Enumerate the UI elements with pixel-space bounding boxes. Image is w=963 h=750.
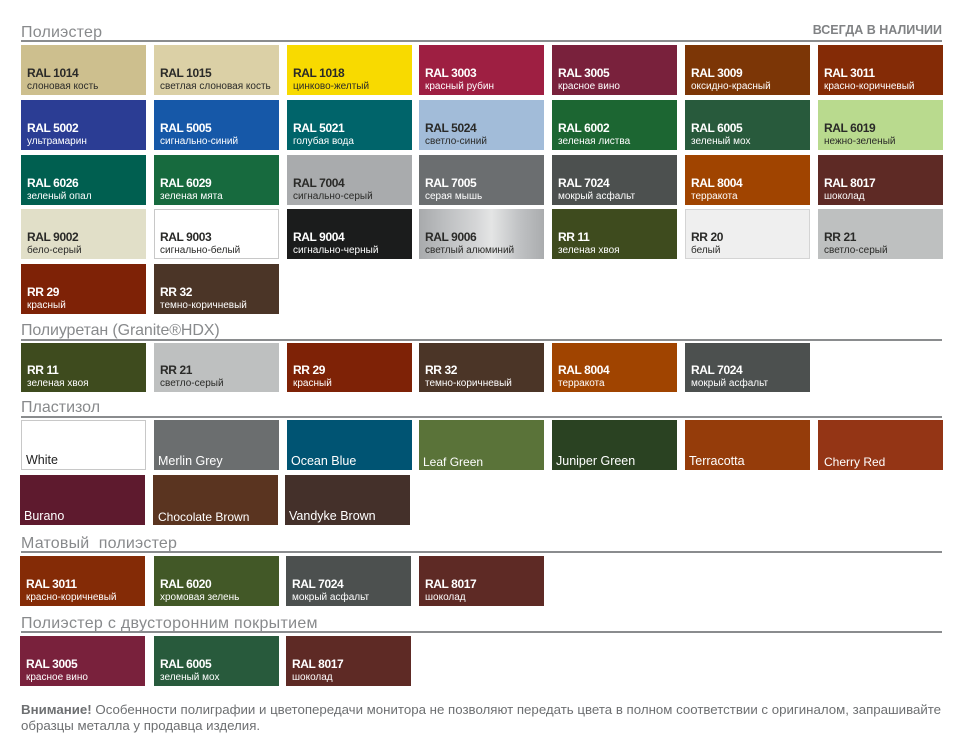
panel: полиэстер swatches: RAL 9004 — [293, 230, 344, 244]
text: внимание: Внимание! Особенности полиграфии и цветопередачи монитора не позволяют передать цвета в полном соответствии с оригиналом, запрашивайте — [21, 702, 941, 717]
panel: полиэстер swatches: RAL 9006 — [425, 230, 476, 244]
panel: полиэстер swatches: бело-серый — [27, 245, 82, 256]
panel: полиэстер swatches: оксидно-красный — [691, 81, 771, 92]
heading: двусторонним покрытием: Полиэстер с двусторонним покрытием — [21, 615, 318, 632]
panel: полиэстер swatches: RAL 3009 — [691, 66, 742, 80]
panel: двусторонние swatches: шоколад — [292, 672, 333, 683]
panel: полиэстер swatches: зеленая листва — [558, 136, 630, 147]
heading: Полиуретан: Полиуретан (Granite®HDX) — [21, 322, 220, 339]
panel: полиуретан swatches: мокрый асфальт — [691, 378, 768, 389]
panel: матовый swatches: RAL 6020 — [160, 577, 211, 591]
panel: матовый swatches: хромовая зелень — [160, 592, 239, 603]
panel: полиуретан swatches: светло-серый — [160, 378, 224, 389]
panel: полиэстер swatches: RR 11 — [558, 230, 589, 244]
panel: матовый swatches: мокрый асфальт — [292, 592, 369, 603]
panel: двусторонние swatches: красное вино — [26, 672, 88, 683]
panel: полиэстер swatches: сигнально-серый — [293, 191, 373, 202]
panel: полиуретан swatches: темно-коричневый — [425, 378, 512, 389]
panel: полиэстер swatches: RAL 7024 — [558, 176, 609, 190]
panel: матовый swatches — [20, 556, 544, 606]
panel: полиэстер swatches: красное вино — [558, 81, 620, 92]
panel: полиэстер swatches: RAL 8004 — [691, 176, 742, 190]
panel: полиэстер swatches: зеленый мох — [691, 136, 750, 147]
panel: полиэстер swatches: светлая слоновая кость — [160, 81, 271, 92]
panel: полиуретан swatches: RR 32 — [425, 363, 457, 377]
panel: матовый swatches: RAL 3011 — [26, 577, 77, 591]
panel: полиэстер swatches: RR 32 — [160, 285, 192, 299]
panel: матовый swatches: RAL 7024 — [292, 577, 343, 591]
panel: полиэстер swatches: терракота — [691, 191, 738, 202]
panel: полиэстер swatches: зеленая мята — [160, 191, 223, 202]
panel: полиэстер swatches: RAL 6019 — [824, 121, 875, 135]
panel: полиэстер swatches: RAL 1015 — [160, 66, 211, 80]
panel: полиэстер swatches: RAL 3003 — [425, 66, 476, 80]
panel: полиуретан swatches: красный — [293, 378, 332, 389]
panel: пластизол swatches: Leaf Green — [423, 455, 483, 469]
panel: двусторонние swatches — [20, 636, 411, 686]
panel: полиэстер swatches: RR 29 — [27, 285, 59, 299]
panel: полиэстер swatches: красно-коричневый — [824, 81, 914, 92]
panel: полиэстер swatches: RAL 5024 — [425, 121, 476, 135]
panel: полиэстер swatches — [21, 45, 943, 314]
panel: матовый swatches: шоколад — [425, 592, 466, 603]
panel: двусторонние swatches: RAL 3005 — [26, 657, 77, 671]
panel: полиэстер swatches: RAL 1018 — [293, 66, 344, 80]
panel: пластизол swatches: Burano — [24, 509, 64, 523]
panel: полиэстер swatches: серая мышь — [425, 191, 482, 202]
panel: полиэстер swatches: RAL 6026 — [27, 176, 78, 190]
panel: пластизол swatches: Chocolate Brown — [158, 510, 249, 524]
text: внимание — [21, 702, 941, 733]
text: внимание: образцы металла у продавца изделия. — [21, 718, 260, 733]
panel: полиэстер swatches: RAL 9003 — [160, 230, 211, 244]
panel: полиэстер swatches: RAL 9002 — [27, 230, 78, 244]
panel: полиэстер swatches: RR 21 — [824, 230, 856, 244]
panel: полиэстер swatches: сигнально-белый — [160, 245, 240, 256]
panel: пластизол swatches — [20, 420, 943, 525]
panel: полиуретан swatches: RAL 8004 — [558, 363, 609, 377]
panel: полиуретан swatches: зеленая хвоя — [27, 378, 89, 389]
panel: полиэстер swatches: светло-серый — [824, 245, 888, 256]
panel: полиэстер swatches: RAL 6005 — [691, 121, 742, 135]
panel: полиэстер swatches: белый — [691, 245, 720, 256]
panel: двусторонние swatches: зеленый мох — [160, 672, 220, 683]
panel: полиэстер swatches: ультрамарин — [27, 136, 87, 147]
panel: полиуретан swatches: RR 21 — [160, 363, 192, 377]
panel: полиэстер swatches: RAL 3005 — [558, 66, 609, 80]
panel: полиэстер swatches: красный — [27, 300, 66, 311]
panel: полиэстер swatches: голубая вода — [293, 136, 354, 147]
panel: пластизол swatches: Vandyke Brown — [289, 509, 376, 523]
panel: полиэстер swatches: RAL 5021 — [293, 121, 344, 135]
panel: полиэстер swatches: мокрый асфальт — [558, 191, 635, 202]
heading: Матовый полиэстер: Матовый полиэстер — [21, 535, 177, 552]
heading: Пластизол: Пластизол — [21, 399, 100, 416]
panel: полиуретан swatches: RR 29 — [293, 363, 325, 377]
panel: полиэстер swatches: RAL 8017 — [824, 176, 875, 190]
panel: пластизол swatches: Terracotta — [689, 454, 745, 468]
panel: полиэстер swatches: RAL 5005 — [160, 121, 211, 135]
panel: полиэстер swatches: RAL 7005 — [425, 176, 476, 190]
panel: пластизол swatches: Ocean Blue — [291, 454, 356, 468]
panel: полиэстер swatches: RAL 1014 — [27, 66, 78, 80]
panel: полиэстер swatches: RAL 6029 — [160, 176, 211, 190]
panel: полиэстер swatches: RAL 7004 — [293, 176, 344, 190]
panel: полиэстер swatches: светло-синий — [425, 136, 487, 147]
panel: полиэстер swatches: RAL 6002 — [558, 121, 609, 135]
panel: полиуретан swatches — [21, 343, 810, 392]
panel: полиэстер swatches: шоколад — [824, 191, 865, 202]
panel: полиэстер swatches: RAL 3011 — [824, 66, 875, 80]
panel: полиуретан swatches: терракота — [558, 378, 605, 389]
panel: пластизол swatches: Cherry Red — [824, 455, 885, 469]
panel: пластизол swatches: Juniper Green — [556, 454, 635, 468]
panel: полиэстер swatches: слоновая кость — [27, 81, 98, 92]
panel: двусторонние swatches: RAL 8017 — [292, 657, 343, 671]
panel: двусторонние swatches: RAL 6005 — [160, 657, 211, 671]
panel: полиэстер swatches: RR 20 — [691, 230, 723, 244]
panel: полиэстер swatches: светлый алюминий — [425, 245, 514, 256]
panel: полиэстер swatches: нежно-зеленый — [824, 136, 895, 147]
panel: полиэстер swatches: темно-коричневый — [160, 300, 247, 311]
panel: полиэстер swatches: RAL 5002 — [27, 121, 78, 135]
panel: полиэстер swatches: красный рубин — [425, 81, 494, 92]
panel: пластизол swatches: White — [26, 453, 58, 467]
panel: полиэстер swatches: сигнально-черный — [293, 245, 378, 256]
panel: матовый swatches: RAL 8017 — [425, 577, 476, 591]
panel: полиэстер swatches: сигнально-синий — [160, 136, 238, 147]
panel: полиэстер swatches: зеленая хвоя — [558, 245, 620, 256]
panel: полиуретан swatches: RAL 7024 — [691, 363, 742, 377]
heading: в наличии: ВСЕГДА В НАЛИЧИИ — [813, 23, 942, 37]
panel: полиуретан swatches: RR 11 — [27, 363, 58, 377]
heading: Полиэстер: Полиэстер — [21, 24, 102, 41]
panel: пластизол swatches: Merlin Grey — [158, 454, 223, 468]
panel: полиэстер swatches: зеленый опал — [27, 191, 92, 202]
panel: полиэстер swatches: цинково-желтый — [293, 81, 369, 92]
panel: матовый swatches: красно-коричневый — [26, 592, 116, 603]
